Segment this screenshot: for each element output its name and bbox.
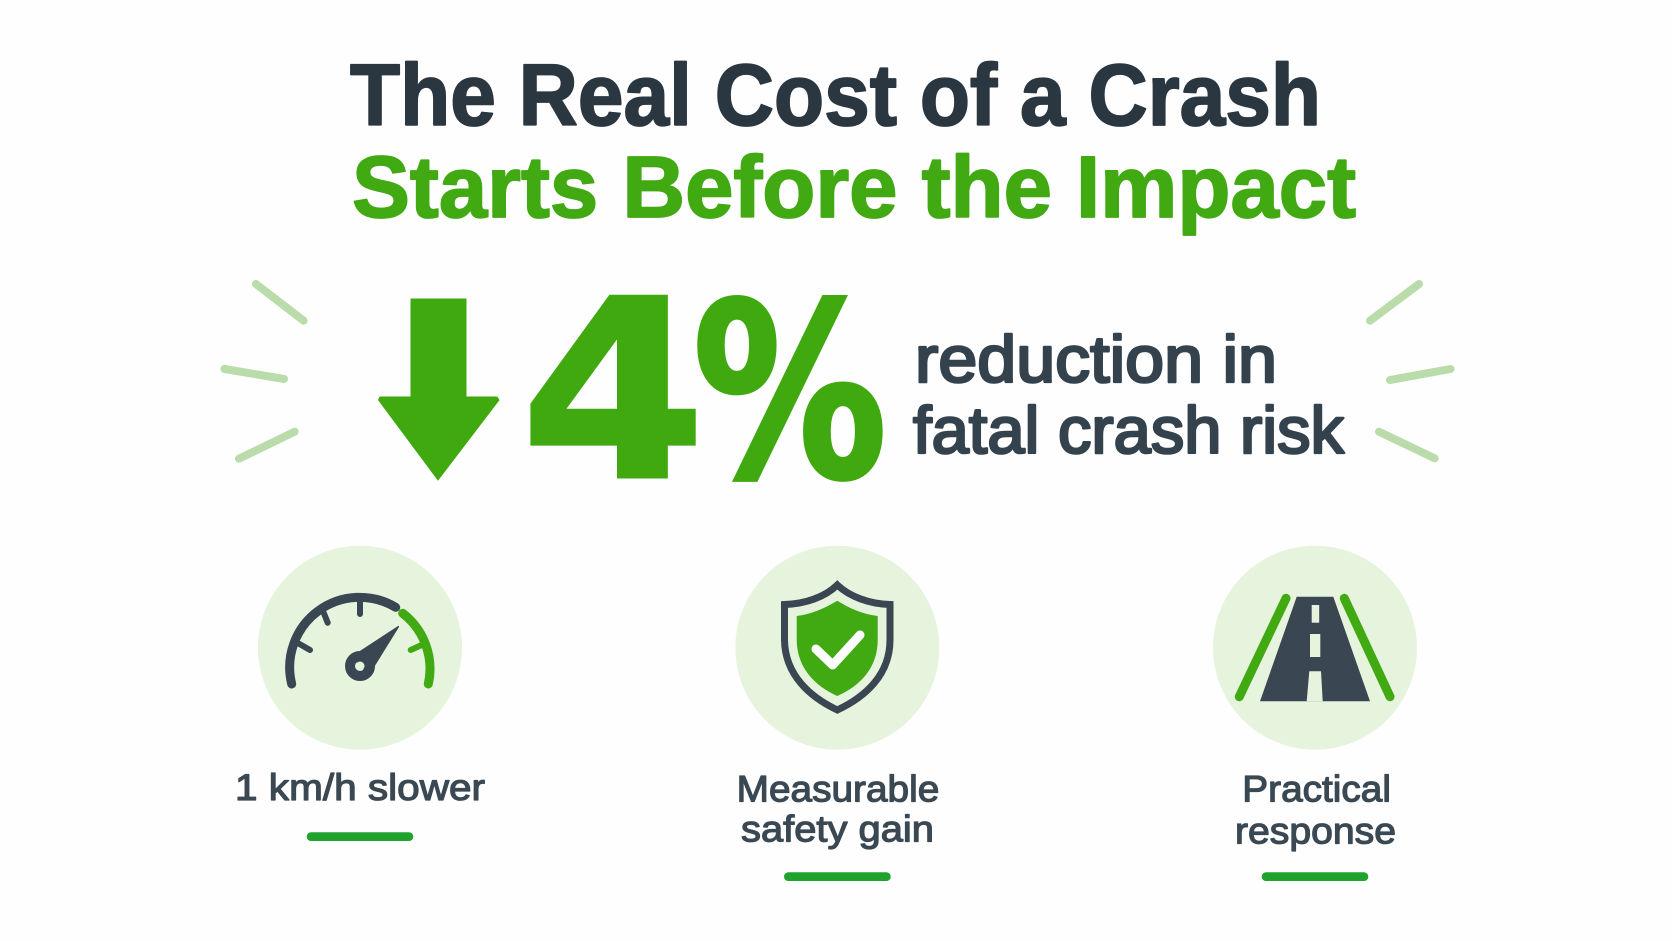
description line 2: fatal crash risk	[913, 393, 1345, 467]
big stat: 4%	[520, 246, 887, 536]
right accent rays	[1370, 284, 1450, 458]
label line 2: safety gain	[741, 809, 934, 850]
percent sign: %	[693, 253, 887, 533]
icon: speedometer	[258, 546, 462, 750]
title line 1: The Real Cost of a Crash	[350, 47, 1321, 144]
label line 1: Measurable	[737, 769, 939, 810]
underline	[784, 872, 891, 881]
underline	[1262, 872, 1368, 881]
panel: practical response	[1213, 546, 1417, 881]
label	[1235, 769, 1396, 851]
panel: 1 km/h slower	[235, 546, 485, 841]
description line 1: reduction in	[915, 322, 1277, 396]
label line 2: response	[1235, 810, 1396, 851]
label	[737, 769, 939, 850]
title line 2: Starts Before the Impact	[352, 139, 1356, 236]
label: 1 km/h slower	[235, 767, 485, 808]
digit 4: 4	[520, 246, 706, 536]
left accent rays	[224, 284, 304, 459]
panel: measurable safety gain	[735, 546, 939, 881]
icon: road	[1213, 546, 1417, 750]
icon: shield	[735, 546, 939, 750]
label line 1: Practical	[1242, 769, 1391, 810]
title	[350, 47, 1356, 236]
icon: down arrow	[379, 299, 499, 480]
underline	[307, 832, 413, 841]
stat description	[913, 322, 1345, 467]
